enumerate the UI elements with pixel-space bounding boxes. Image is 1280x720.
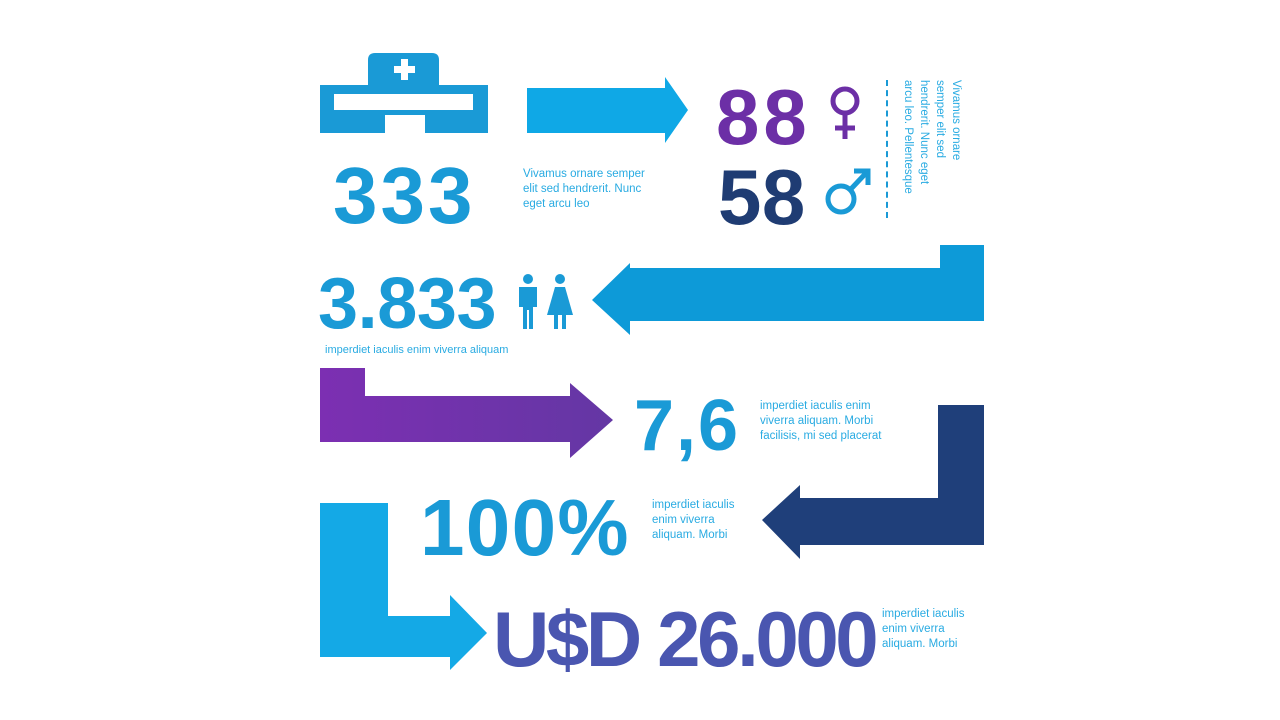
number 88: 88 [716,73,811,161]
number 100%: 100% [420,483,630,572]
arrow: purple [320,368,613,458]
text: USD: aliquam. Morbi [882,638,957,650]
dashed line [886,80,888,218]
icon: hospital [320,53,488,133]
number 3.833: 3.833 [318,264,496,344]
text: intro [523,168,645,210]
icon: people [519,274,573,329]
text: intro: eget arcu leo [523,198,590,210]
text: vertical: hendrerit. Nunc eget [918,80,930,184]
text: USD [882,608,964,650]
text: vertical: semper elit sed [934,80,946,158]
number USD: U$D 26.000 [493,595,875,683]
icon: male [826,168,870,214]
arrow: cyan L [320,503,487,670]
text: 100%: aliquam. Morbi [652,529,727,541]
text: USD: enim viverra [882,623,945,635]
text: 3.833 caption: imperdiet iaculis enim viverra aliquam [325,344,508,356]
number 7,6: 7,6 [634,386,740,466]
text: vertical: arcu leo. Pellentesque [902,80,914,194]
text: vertical [902,80,962,194]
text: intro: elit sed hendrerit. Nunc [523,183,641,195]
text: intro: Vivamus ornare semper [523,168,645,180]
text: vertical: Vivamus ornare [950,80,962,160]
icon: female [830,86,860,139]
text: 7,6: facilisis, mi sed placerat [760,430,881,442]
text: USD: imperdiet iaculis [882,608,964,620]
text: 100% [652,499,734,541]
text: 7,6 [760,400,882,442]
arrow: navy [762,405,984,559]
text: 100%: imperdiet iaculis [652,499,734,511]
number 58: 58 [718,153,806,241]
arrow: big left [592,245,984,335]
text: 100%: enim viverra [652,514,715,526]
text: 7,6: imperdiet iaculis enim [760,400,871,412]
text: 7,6: viverra aliquam. Morbi [760,415,873,427]
arrow: top right [527,77,688,143]
number 333: 333 [333,151,475,240]
